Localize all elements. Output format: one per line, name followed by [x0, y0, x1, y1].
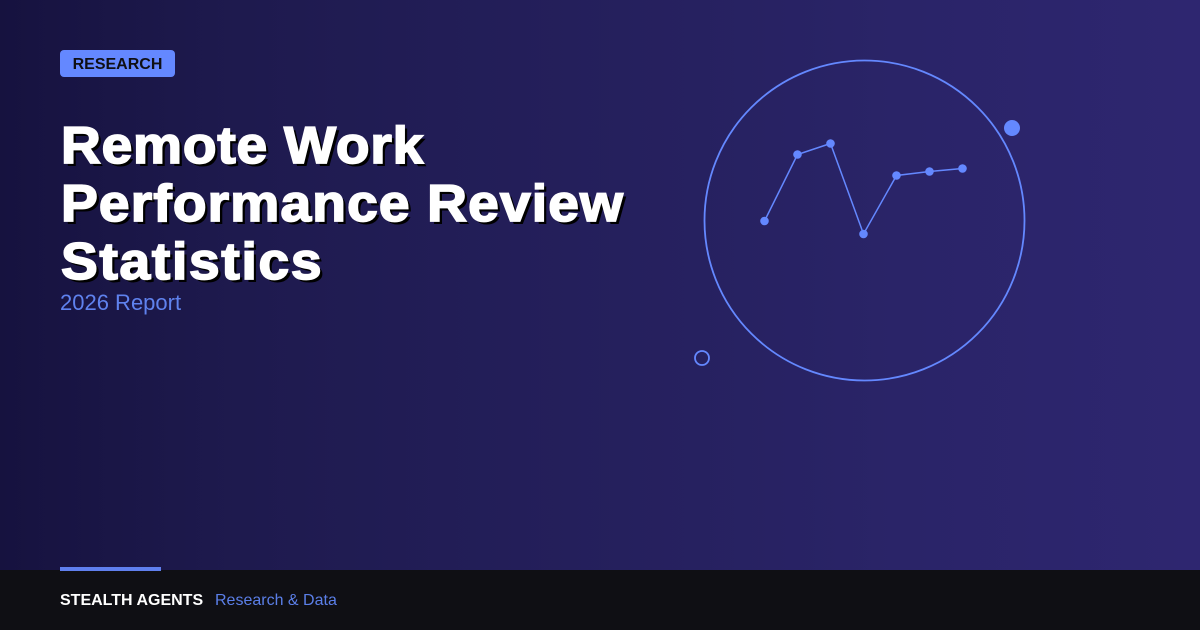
title [61, 117, 626, 291]
badge: RESEARCH [60, 50, 175, 77]
line chart [760, 139, 967, 238]
brand name: STEALTH AGENTS [60, 592, 203, 609]
chart illustration [694, 60, 1026, 382]
title: Performance Review [61, 175, 624, 233]
accent bar [60, 567, 161, 571]
subtitle: 2026 Report [60, 290, 181, 315]
badge: RESEARCH: RESEARCH [73, 56, 162, 73]
title: Statistics [61, 233, 323, 291]
title: Remote Work [61, 117, 424, 175]
hollow accent ring [695, 351, 709, 365]
footer bar [0, 570, 1200, 630]
filled accent dot [1004, 120, 1020, 136]
footer tagline: Research & Data [215, 592, 337, 609]
large circle [704, 60, 1024, 380]
